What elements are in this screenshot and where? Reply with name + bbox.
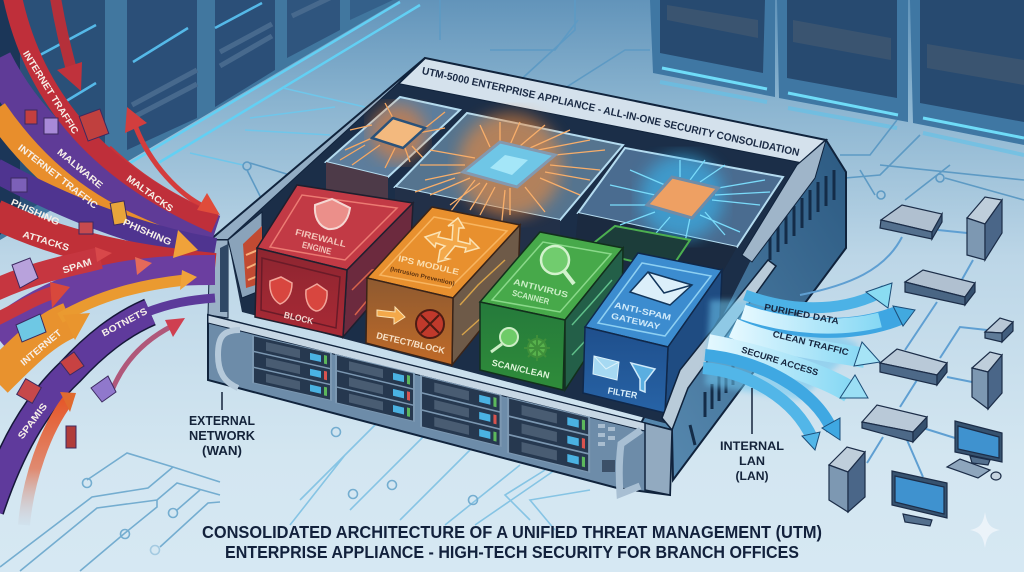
purple stream: taper [145, 298, 215, 313]
icon: scan magnifier [491, 328, 518, 352]
green module behind [585, 226, 690, 270]
anti-spam module [583, 253, 722, 413]
arrow head: lower two [802, 432, 820, 450]
heading: anti-spam gateway: GATEWAY [610, 311, 662, 332]
right server racks [650, 0, 1024, 155]
left server racks [0, 0, 420, 240]
LAN callout: INTERNAL [720, 441, 784, 453]
purple stream: botnets [0, 312, 150, 510]
icons: block shields [270, 277, 327, 311]
orange stream: internet traffic [0, 110, 180, 246]
appliance title strip text: UTM-5000 ENTERPRISE APPLIANCE - ALL-IN-ONE SECURITY CONSOLIDATION [421, 65, 800, 159]
lid with printed strip [398, 58, 826, 163]
heading: antivirus scanner [511, 276, 569, 307]
label: clean traffic: CLEAN TRAFFIC [772, 329, 850, 358]
stream: lower band two [703, 368, 812, 438]
floor circuit traces [243, 0, 1024, 200]
LAN callout [720, 388, 784, 483]
side vents [690, 170, 834, 445]
icon: virus [524, 335, 550, 361]
printer [985, 318, 1013, 342]
stream: clean traffic [733, 328, 865, 358]
icon: magnifier [541, 246, 574, 284]
control panel [598, 424, 615, 472]
botnets arrow head [165, 318, 185, 337]
arrow heads [50, 62, 220, 412]
clean data streams [703, 283, 915, 450]
stream: purified data [743, 312, 900, 328]
red stream top arrow [55, 0, 71, 68]
icon: blocked circle [416, 310, 444, 338]
lid left rail [210, 58, 425, 240]
right inner rail [742, 140, 826, 262]
red thin arrow shaft [135, 125, 205, 207]
label: detect/block: DETECT/BLOCK [375, 330, 446, 356]
icon: arrows [425, 218, 479, 262]
spam arrow heads [95, 247, 112, 262]
chassis side wall [640, 140, 846, 480]
heading: ips module: IPS MODULE [397, 253, 460, 277]
botnets arrow shaft [113, 326, 172, 388]
icon: spam envelope [593, 356, 619, 380]
drive bays [507, 397, 590, 473]
title: CONSOLIDATED ARCHITECTURE OF A UNIFIED THREAT MANAGEMENT (UTM) [202, 522, 822, 542]
LAN devices [829, 197, 1013, 526]
WAN callout: (WAN) [202, 444, 242, 458]
threat streams [0, 0, 220, 525]
orange arrow lower [24, 400, 68, 525]
dark purple stream [0, 170, 215, 250]
icon: sparkle [970, 512, 1000, 548]
switch C [880, 349, 947, 385]
switch A [880, 205, 942, 239]
title: ENTERPRISE APPLIANCE - HIGH-TECH SECURITY FOR BRANCH OFFICES [225, 542, 799, 562]
dark interior [228, 84, 800, 424]
stream: purified data highlight [743, 312, 880, 326]
right rack ear [645, 423, 672, 495]
label: internet traffic: INTERNET TRAFFIC [16, 143, 100, 212]
orange stream: thin [60, 280, 185, 318]
right rack handle [619, 430, 641, 494]
internet arrow head [63, 313, 90, 340]
processor board: right [570, 148, 783, 330]
orange arrow head upper [180, 270, 197, 290]
left side frame with red glowing module [208, 212, 262, 318]
monitor A [955, 421, 1002, 465]
red stream: low [0, 292, 55, 320]
firewall module [255, 185, 413, 337]
processor board: left [326, 97, 460, 205]
ips module [366, 207, 520, 365]
tower C [829, 447, 865, 512]
label: botnets: BOTNETS [100, 306, 149, 339]
red stream: spam [0, 258, 100, 290]
label: purified data: PURIFIED DATA [763, 302, 840, 326]
maltacks arrow head lower [197, 193, 220, 215]
WAN callout: EXTERNAL [189, 414, 255, 428]
heading: firewall engine [294, 227, 348, 257]
tower A [967, 197, 1002, 260]
drive bays [335, 354, 415, 422]
purple stream lower [0, 270, 215, 335]
stream: secure access [708, 345, 850, 392]
heading: antivirus scanner: SCANNER [511, 288, 550, 307]
maltacks arrow head upper [125, 107, 147, 133]
arrow head: purified data [893, 306, 915, 326]
tower B [972, 352, 1002, 409]
label: phishing right: PHISHING [121, 217, 173, 248]
processor board: center [395, 113, 623, 262]
heading: anti-spam gateway [610, 300, 672, 332]
heading: antivirus scanner: ANTIVIRUS [512, 276, 569, 300]
antivirus module [480, 232, 623, 390]
label: secure access: SECURE ACCESS [740, 345, 820, 378]
purple stream: botnets fill [0, 312, 150, 510]
label: internet traffic top: INTERNET TRAFFIC [20, 49, 80, 136]
floating threat icons [11, 109, 128, 448]
drive bays [420, 375, 502, 447]
glow under streams [705, 300, 860, 400]
heading: firewall engine: FIREWALL [294, 227, 348, 249]
keyboard and mouse [947, 459, 1001, 480]
icon: detect arrow [377, 307, 405, 324]
icon: shield [315, 199, 350, 229]
label: internet: INTERNET [19, 328, 64, 368]
heading: anti-spam gateway: ANTI-SPAM [613, 300, 672, 322]
drive bays [252, 335, 332, 401]
label: malware: MALWARE [55, 147, 105, 191]
lower side lip [662, 260, 776, 430]
phishing arrow head [173, 230, 198, 258]
stream: lower band one [705, 355, 832, 430]
stream labels [9, 49, 175, 442]
lower orange arrow head [60, 392, 76, 412]
red stream: maltacks [105, 152, 215, 222]
arrow head: upper [866, 283, 892, 308]
purple stream: malware [0, 60, 215, 232]
heading: ips module: (Intrusion Prevention) [389, 267, 455, 287]
label: phishing left: PHISHING [9, 197, 61, 228]
monitor B [892, 471, 947, 526]
label: filter: FILTER [607, 386, 639, 401]
left rack ear [218, 330, 240, 388]
label: spam: SPAM [61, 257, 93, 276]
label: block: BLOCK [283, 310, 315, 326]
top arrow head [57, 62, 82, 91]
icon: funnel [631, 363, 655, 392]
arrow head: clean traffic [854, 342, 880, 366]
arrow head: secure access [840, 375, 868, 398]
orange stream: internet [0, 320, 70, 380]
front panel [208, 315, 672, 495]
heading: ips module [389, 253, 460, 287]
icon: envelope [630, 272, 692, 305]
arrow head: lower one [822, 418, 840, 440]
label: maltacks: MALTACKS [124, 173, 175, 215]
stream: upper dark band [745, 290, 885, 308]
red stream: internet traffic [12, 0, 215, 224]
WAN callout: NETWORK [189, 429, 255, 443]
red stream: attacks [0, 214, 215, 268]
appliance [208, 58, 846, 495]
label: attacks: ATTACKS [21, 229, 70, 254]
switch D [862, 405, 927, 442]
title [202, 522, 822, 562]
label: spamis: SPAMIS [16, 401, 50, 442]
LAN callout: LAN [739, 456, 765, 468]
arrow head: lower red [50, 282, 70, 308]
LAN callout: (LAN) [736, 471, 769, 483]
lower floor circuit traces [0, 420, 590, 571]
clean stream labels [740, 302, 850, 378]
heading: firewall engine: ENGINE [301, 240, 332, 257]
label: scan/clean: SCAN/CLEAN [491, 358, 551, 381]
switch B [905, 270, 975, 305]
WAN callout [189, 392, 255, 458]
network connection lines [800, 230, 987, 477]
